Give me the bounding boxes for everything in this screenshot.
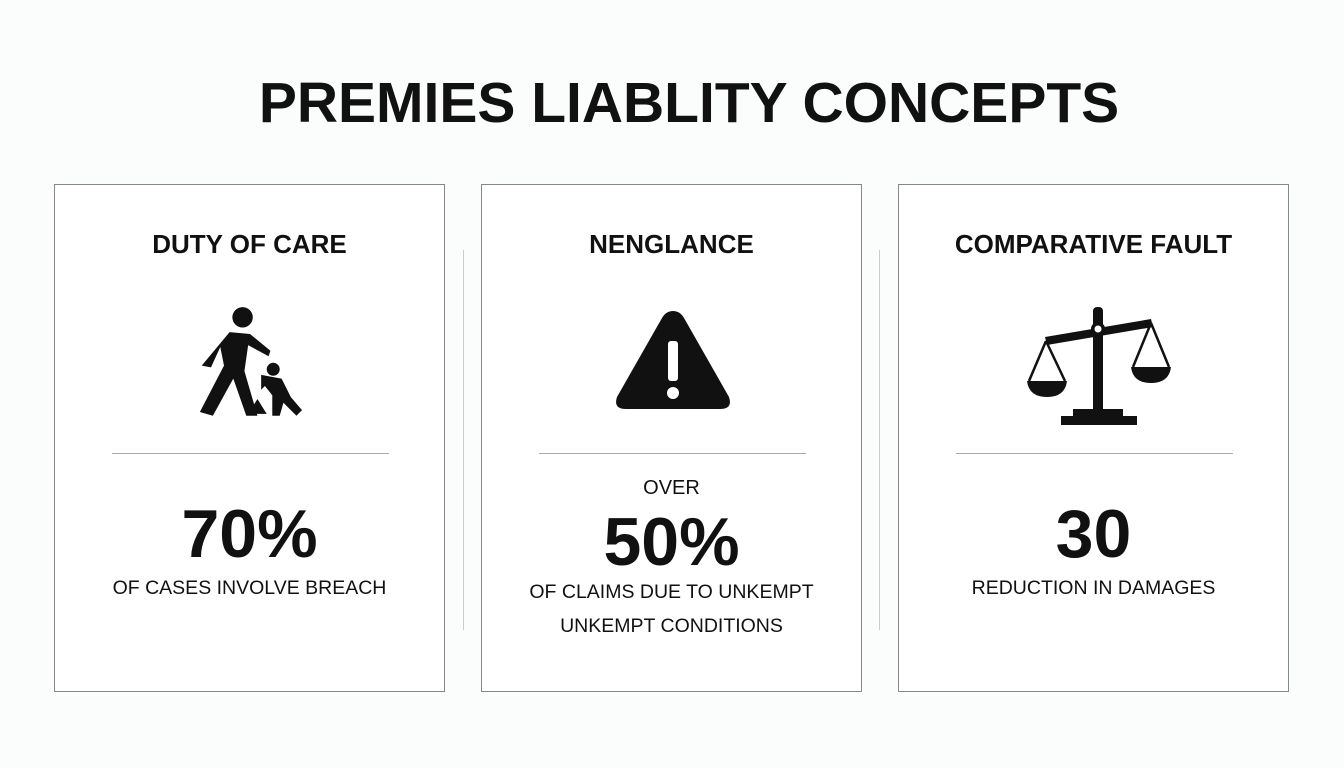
- text: UNKEMPT CONDITIONS: [560, 615, 783, 637]
- text: [529, 581, 814, 637]
- title: PREMIES LIABLITY CONCEPTS: [259, 71, 1119, 135]
- text: OF CLAIMS DUE TO UNKEMPT: [529, 581, 814, 603]
- icon: scales: [1027, 307, 1171, 425]
- stat: OVER: [643, 477, 700, 499]
- heading: COMPARATIVE FAULT: [955, 229, 1232, 259]
- stat: 70%: [181, 496, 318, 572]
- panel: negligence: 50%: [603, 504, 740, 580]
- heading: NENGLANCE: [589, 229, 754, 259]
- panel: comparative fault: [898, 184, 1289, 692]
- panel: duty of care: [54, 184, 445, 692]
- stat: 30: [1056, 496, 1131, 572]
- icon: adult helping child: [200, 307, 302, 416]
- text: OF CASES INVOLVE BREACH: [113, 577, 386, 599]
- panel: negligence: [481, 184, 862, 692]
- text: REDUCTION IN DAMAGES: [972, 577, 1215, 599]
- icon: warning triangle: [616, 311, 730, 409]
- heading: DUTY OF CARE: [152, 229, 347, 259]
